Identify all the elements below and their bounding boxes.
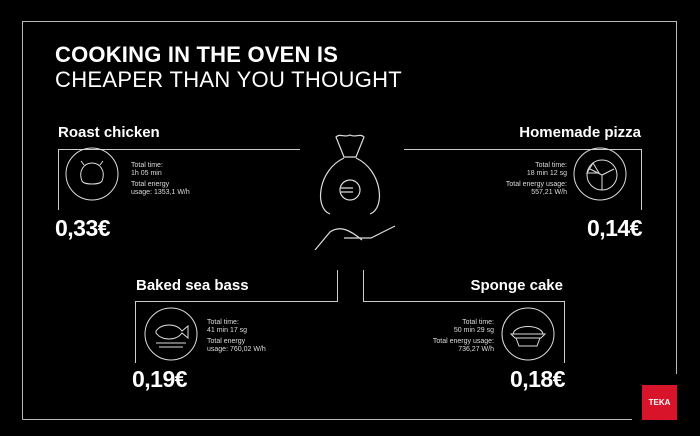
text: stats: 1h 05 min xyxy=(131,170,162,177)
text: stats: 18 min 12 sg xyxy=(527,170,567,177)
text: stats: Total time: xyxy=(462,319,494,326)
panel: roast chicken xyxy=(55,124,190,241)
text: stats: Total time: xyxy=(535,162,567,169)
heading: Homemade pizza xyxy=(519,124,641,141)
title: COOKING IN THE OVEN IS xyxy=(55,42,338,67)
icon: money bag and hand xyxy=(314,134,396,250)
price: 0,18€ xyxy=(510,366,565,392)
text: stats: Total energy usage: xyxy=(506,181,567,188)
text: stats: Total energy xyxy=(207,338,245,345)
text: stats: 736,27 W/h xyxy=(458,346,494,353)
text: stats xyxy=(433,318,494,353)
text: stats xyxy=(506,162,567,196)
text: stats: Total energy usage: xyxy=(433,338,494,345)
logo: TEKA xyxy=(642,385,677,420)
heading: Sponge cake xyxy=(470,277,563,294)
price: 0,19€ xyxy=(132,366,187,392)
text: stats: Total time: xyxy=(207,319,239,326)
text: stats: Total time: xyxy=(131,162,163,169)
title: CHEAPER THAN YOU THOUGHT xyxy=(55,67,402,92)
text: stats: Total energy xyxy=(131,181,169,188)
text: stats: usage: 760,02 W/h xyxy=(207,346,266,353)
text: stats: 41 min 17 sg xyxy=(207,327,247,334)
text: stats: usage: 1353,1 W/h xyxy=(131,189,190,196)
text: stats: 50 min 29 sg xyxy=(454,327,494,334)
heading: Baked sea bass xyxy=(136,277,249,294)
panel: sponge cake xyxy=(433,277,566,392)
logo: TEKA: TEKA xyxy=(649,398,670,407)
panel: homemade pizza xyxy=(506,124,642,241)
icon: cake xyxy=(502,308,554,360)
price: 0,14€ xyxy=(587,215,642,241)
text: stats: 557,21 W/h xyxy=(531,189,567,196)
text: stats xyxy=(207,318,266,353)
title xyxy=(55,42,402,92)
icon: fish xyxy=(144,308,198,360)
icon: chicken xyxy=(66,148,118,200)
price: 0,33€ xyxy=(55,215,110,241)
panel: baked sea bass xyxy=(132,277,266,392)
heading: Roast chicken xyxy=(58,124,160,141)
text: stats xyxy=(131,162,190,196)
icon: pizza xyxy=(574,148,626,200)
